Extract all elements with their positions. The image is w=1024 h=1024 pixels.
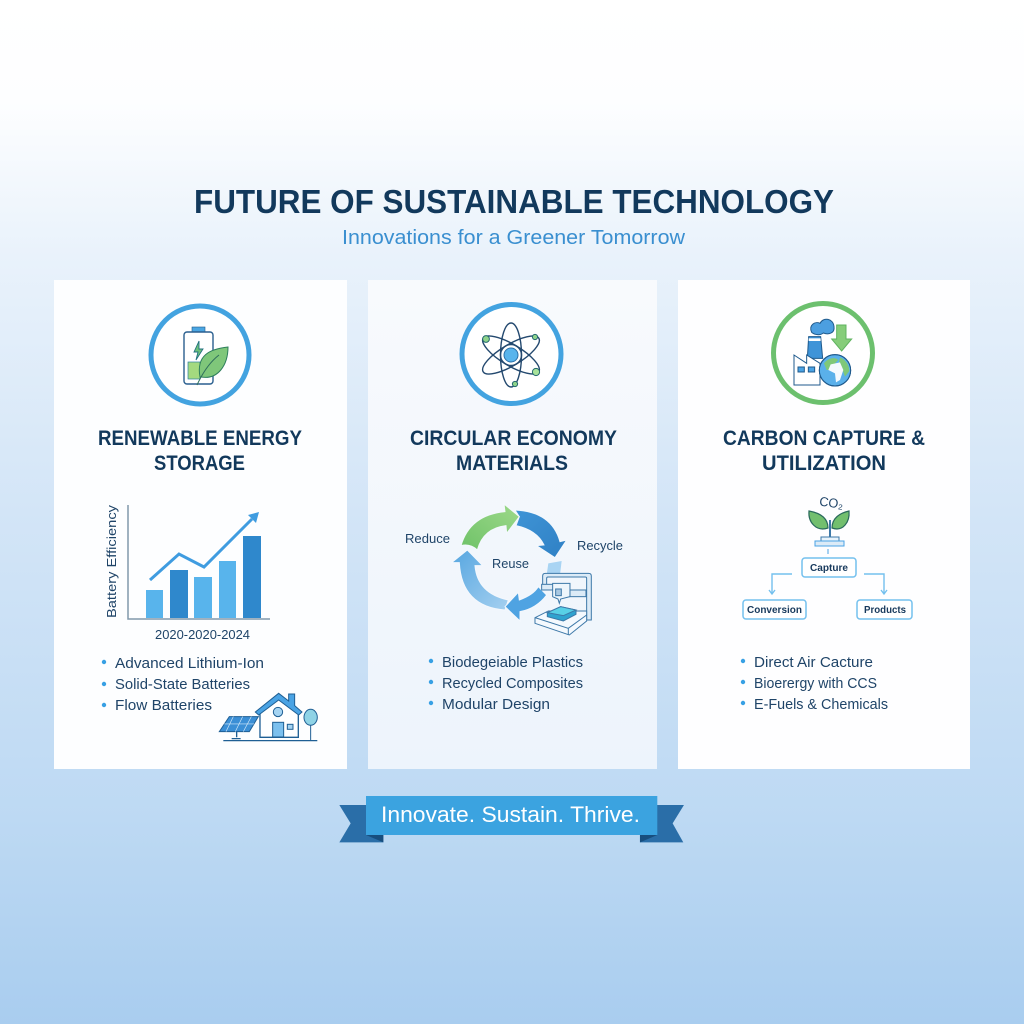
process flow: capture, conversion, products — [743, 494, 912, 619]
arrow: reduce — [461, 504, 519, 550]
icon: solar house — [219, 693, 317, 741]
panel: renewable energy storage — [54, 280, 347, 769]
card background — [368, 280, 657, 769]
bullet list: Solid-State Batteries — [115, 676, 250, 693]
icon: battery and leaf — [151, 306, 249, 404]
icon: atom — [462, 304, 561, 404]
card background — [54, 280, 347, 769]
cycle diagram: reduce reuse recycle — [452, 504, 591, 635]
icon: co2 seedling — [809, 494, 849, 554]
heading — [410, 427, 617, 475]
heading: RENEWABLE ENERGY — [98, 427, 302, 450]
bar chart: battery efficiency: 2020-2020-2024 — [155, 627, 250, 642]
icon: factory, cloud and globe — [774, 304, 872, 402]
heading: CIRCULAR ECONOMY — [410, 427, 617, 450]
arrow: to products — [864, 574, 887, 594]
arrow: reuse — [452, 550, 508, 610]
arrow: to conversion — [769, 574, 792, 594]
title: FUTURE OF SUSTAINABLE TECHNOLOGY — [194, 183, 834, 220]
card background — [678, 280, 970, 769]
heading: UTILIZATION — [762, 452, 886, 475]
panel: carbon capture and utilization — [678, 280, 970, 769]
cycle label: reuse: Reuse — [492, 556, 529, 571]
bullet list — [741, 654, 888, 713]
subtitle: Innovations for a Greener Tomorrow — [342, 227, 686, 249]
heading: STORAGE — [154, 452, 245, 475]
heading — [98, 427, 302, 475]
arrow: recycle — [515, 510, 567, 558]
ribbon banner — [339, 796, 684, 842]
bullet list: Direct Air Cacture — [754, 654, 873, 671]
box: capture: Capture — [810, 562, 848, 574]
heading — [723, 427, 925, 475]
heading: MATERIALS — [456, 452, 568, 475]
box: products: Products — [864, 604, 906, 616]
bar chart: battery efficiency: Battery Efficiency — [104, 504, 119, 618]
bullet list: E-Fuels & Chemicals — [754, 696, 888, 713]
bullet list: Modular Design — [442, 696, 550, 713]
bullet list: Flow Batteries — [115, 697, 212, 714]
panel: circular economy materials — [368, 280, 657, 769]
bar chart: battery efficiency — [104, 504, 270, 642]
bullet list — [429, 654, 583, 713]
bullet list: Bioerergy with CCS — [754, 675, 877, 692]
cycle label: recycle: Recycle — [577, 538, 623, 553]
box: conversion — [743, 600, 806, 619]
icon: 3d printer — [535, 573, 591, 635]
bullet list — [102, 655, 264, 714]
cycle label: reduce: Reduce — [405, 531, 450, 546]
box: products — [857, 600, 912, 619]
bullet list: Recycled Composites — [442, 675, 583, 692]
bullet list: Advanced Lithium-Ion — [115, 655, 264, 672]
arrow: return — [505, 587, 547, 621]
bullet list: Biodegeiable Plastics — [442, 654, 583, 671]
box: capture — [802, 558, 856, 577]
box: conversion: Conversion — [747, 604, 802, 616]
ribbon banner: Innovate. Sustain. Thrive. — [381, 802, 640, 827]
icon: co2 seedling: CO₂ — [818, 494, 844, 512]
heading: CARBON CAPTURE & — [723, 427, 925, 450]
